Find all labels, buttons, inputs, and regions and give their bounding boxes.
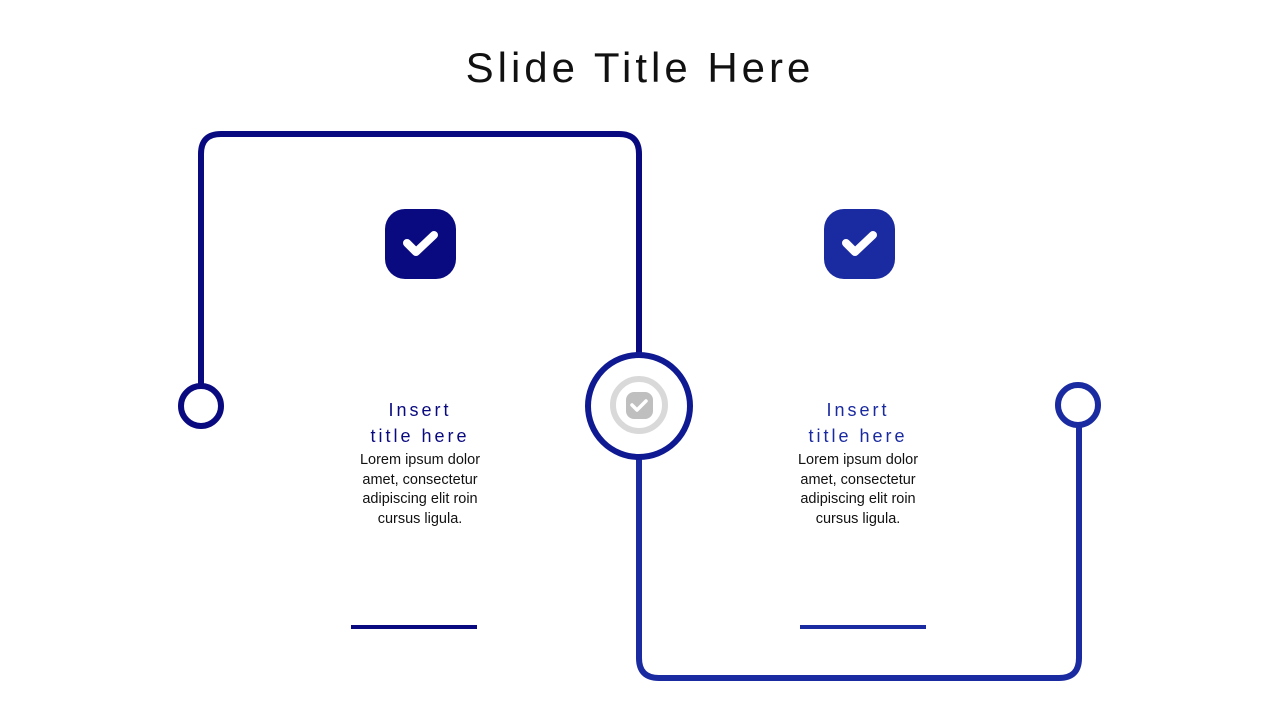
text block right: Lorem ipsum dolor xyxy=(798,452,918,468)
text block left: Lorem ipsum dolor xyxy=(360,452,480,468)
text block left: cursus ligula. xyxy=(378,510,462,526)
text block left xyxy=(360,400,480,526)
text block left: Insert xyxy=(388,400,452,420)
underline right xyxy=(800,625,926,629)
path: left loop xyxy=(181,134,639,426)
path: right loop xyxy=(639,385,1098,678)
text block right: Insert xyxy=(826,400,890,420)
text block right: cursus ligula. xyxy=(816,510,900,526)
center hub circle xyxy=(588,355,690,457)
underline left xyxy=(351,625,477,629)
icon: check right xyxy=(824,209,895,279)
text block right: adipiscing elit roin xyxy=(800,491,916,507)
icon: check left xyxy=(385,209,456,279)
text block right xyxy=(798,400,918,526)
text block right: title here xyxy=(808,426,908,446)
text block right: amet, consectetur xyxy=(800,472,916,488)
title: Slide Title Here xyxy=(466,44,814,91)
text block left: amet, consectetur xyxy=(362,472,478,488)
text block left: title here xyxy=(370,426,470,446)
text block left: adipiscing elit roin xyxy=(362,491,478,507)
